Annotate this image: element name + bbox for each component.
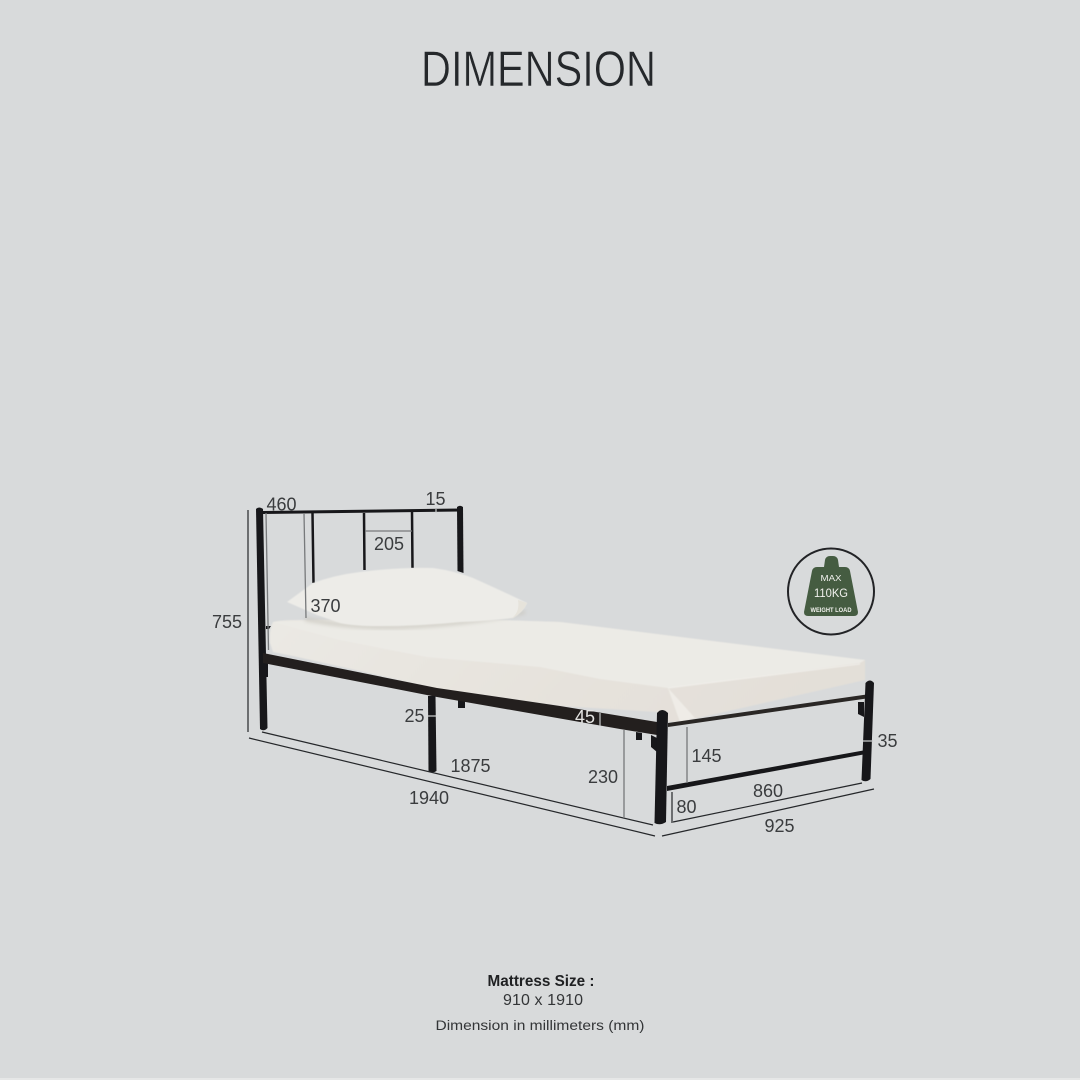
dimension labels: 15 [425,489,446,509]
centre leg [428,696,436,772]
mattress size note: Mattress Size : [488,973,594,990]
dimension labels: 145 [691,746,722,766]
headboard [263,506,464,583]
weight load badge [788,548,874,634]
dimension labels [212,489,898,836]
mattress size note: Dimension in millimeters (mm) [436,1018,644,1033]
mattress [270,619,865,722]
dimension labels: 45 [575,707,595,727]
dimension lines [248,509,874,836]
dimension labels: 860 [753,781,783,801]
weight load badge: 110KG [814,588,848,600]
title: DIMENSION [421,41,656,97]
bed illustration [256,506,874,824]
dimension labels: 1875 [450,756,491,776]
dimension labels: 25 [404,706,425,726]
pillow [287,568,527,627]
dimension labels: 230 [588,767,618,787]
side rail [263,653,657,735]
dimension labels: 35 [877,731,898,751]
back legs and stubs [263,626,642,740]
weight load badge: WEIGHT LOAD [810,608,852,614]
foot posts [654,680,874,824]
dimension labels: 460 [266,494,297,514]
dimension labels: 205 [374,534,404,554]
dimension labels: 370 [310,596,341,616]
dimension labels: 80 [676,797,697,817]
dimension labels: 1940 [409,788,449,808]
icon: weight [804,556,858,616]
left head post [256,508,268,730]
dimension labels: 925 [764,816,795,836]
foot end rails [651,694,870,791]
dimension labels: 755 [212,612,242,632]
mattress size note [436,973,644,1033]
weight load badge: MAX [820,574,842,583]
mattress size note: 910 x 1910 [503,992,583,1009]
